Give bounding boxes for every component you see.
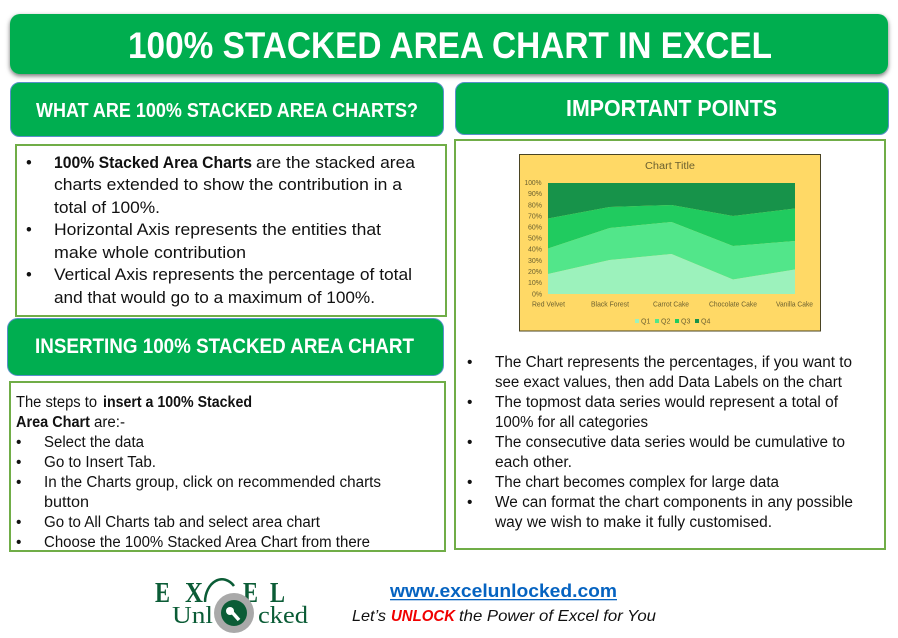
tagline: UNLOCK	[391, 608, 456, 625]
vertical axis labels: 10%	[528, 280, 542, 287]
text block: definition bullets: total of 100%.	[54, 199, 160, 217]
text block: steps: The steps to	[16, 394, 97, 411]
legend: Q3	[681, 318, 690, 326]
vertical axis labels: 40%	[528, 246, 542, 254]
panel: important points	[455, 140, 885, 549]
legend: Q4	[701, 318, 710, 326]
text block: definition bullets: 100% Stacked Area Charts	[54, 154, 252, 172]
text block: definition bullets: Vertical Axis represents the percentage of total	[54, 266, 412, 284]
text block: steps: Go to Insert Tab.	[44, 454, 156, 471]
text block: steps: are:-	[94, 414, 125, 431]
text block: important points bullets	[467, 354, 853, 531]
horizontal axis labels: Carrot Cake	[653, 302, 689, 308]
horizontal axis labels	[532, 302, 813, 308]
text block: steps: •	[16, 514, 21, 531]
text block: steps: insert a 100% Stacked	[103, 394, 252, 411]
text block: steps: •	[16, 454, 21, 471]
vertical axis labels: 90%	[528, 191, 542, 198]
text block: important points bullets: We can format the chart components in any possible	[495, 494, 853, 511]
text block: steps: In the Charts group, click on recommended charts	[44, 474, 381, 491]
text block: steps: Area Chart	[16, 414, 90, 431]
text block: definition bullets: •	[26, 266, 32, 284]
text block: definition bullets: and that would go to a maximum of 100%.	[54, 289, 375, 307]
logo: Excel Unlocked: cked	[258, 603, 308, 629]
text block: steps: •	[16, 434, 21, 451]
text block: important points bullets: see exact values, then add Data Labels on the chart	[495, 374, 843, 391]
website link: www.excelunlocked.com	[389, 581, 617, 601]
vertical axis labels	[524, 180, 542, 298]
legend: Q2	[661, 318, 670, 326]
text block: important points bullets: •	[467, 474, 472, 491]
text block: steps: •	[16, 474, 21, 491]
vertical axis labels: 70%	[528, 214, 542, 220]
text block: steps: Choose the 100% Stacked Area Chart from there	[44, 534, 370, 551]
text block: important points bullets: •	[467, 354, 472, 371]
text block: important points bullets: •	[467, 394, 472, 411]
text block: steps: button	[44, 494, 89, 511]
text block: definition bullets: Horizontal Axis represents the entities that	[54, 221, 381, 239]
heading: inserting chart: INSERTING 100% STACKED AREA CHART	[35, 335, 414, 358]
tagline: the Power of Excel for You	[459, 608, 656, 625]
horizontal axis labels: Chocolate Cake	[709, 302, 757, 308]
legend	[635, 318, 710, 326]
text block: important points bullets: each other.	[495, 454, 572, 471]
text block: definition bullets: are the stacked area	[256, 154, 416, 172]
area series: Q1	[548, 254, 795, 294]
text block: important points bullets: The chart becomes complex for large data	[495, 474, 779, 491]
legend: Q1	[641, 318, 650, 326]
text block: important points bullets: •	[467, 494, 472, 511]
chart: 100% stacked area	[520, 154, 820, 331]
text block: important points bullets: •	[467, 434, 472, 451]
heading: inserting chart	[8, 318, 444, 376]
icon: padlock	[205, 579, 254, 633]
text block: steps: •	[16, 534, 21, 551]
text block: important points bullets: way we wish to make it fully customised.	[494, 514, 772, 531]
text block: important points bullets: The Chart represents the percentages, if you want to	[495, 354, 852, 371]
text block: definition bullets: •	[26, 221, 32, 239]
tagline	[352, 608, 656, 625]
vertical axis labels: 0%	[532, 292, 542, 298]
tagline: Let’s	[352, 608, 386, 625]
logo: Excel Unlocked: X	[185, 577, 203, 609]
heading: important points	[456, 82, 888, 134]
panel: definition	[16, 145, 446, 316]
area series: Q3	[548, 205, 795, 248]
text block: important points bullets: The topmost data series would represent a total of	[495, 394, 839, 411]
horizontal axis labels: Vanilla Cake	[776, 302, 813, 308]
logo: Excel Unlocked: Unl	[172, 603, 213, 629]
panel: inserting steps	[10, 382, 445, 551]
logo: Excel Unlocked	[155, 577, 308, 633]
area series: Q4	[548, 183, 795, 218]
heading: what are 100% stacked area charts: WHAT ARE 100% STACKED AREA CHARTS?	[36, 100, 418, 122]
text block: steps	[16, 394, 381, 551]
logo: Excel Unlocked: E	[243, 577, 258, 609]
text block: definition bullets: •	[26, 154, 32, 172]
vertical axis labels: 100%	[524, 180, 542, 187]
area series: Q2	[548, 222, 795, 280]
heading: what are 100% stacked area charts	[10, 82, 444, 136]
vertical axis labels: 60%	[528, 224, 542, 232]
logo: Excel Unlocked: L	[270, 577, 285, 609]
text block: important points bullets: 100% for all categories	[495, 414, 648, 431]
title	[10, 14, 888, 74]
chart title: Chart Title	[645, 161, 695, 172]
text block: steps: Go to All Charts tab and select area chart	[44, 514, 321, 531]
vertical axis labels: 20%	[528, 269, 542, 276]
horizontal axis labels: Black Forest	[591, 302, 629, 308]
text block: important points bullets: The consecutive data series would be cumulative to	[495, 434, 845, 451]
vertical axis labels: 50%	[528, 236, 542, 242]
vertical axis labels: 80%	[528, 202, 542, 210]
text block: definition bullets	[26, 154, 416, 307]
logo: Excel Unlocked: E	[155, 577, 170, 609]
heading: important points: IMPORTANT POINTS	[566, 95, 777, 121]
horizontal axis labels: Red Velvet	[532, 302, 565, 308]
text block: definition bullets: charts extended to show the contribution in a	[54, 176, 403, 194]
vertical axis labels: 30%	[528, 258, 542, 265]
text block: steps: Select the data	[44, 434, 144, 451]
title: 100% STACKED AREA CHART IN EXCEL	[128, 25, 772, 66]
text block: definition bullets: make whole contribution	[54, 244, 246, 262]
